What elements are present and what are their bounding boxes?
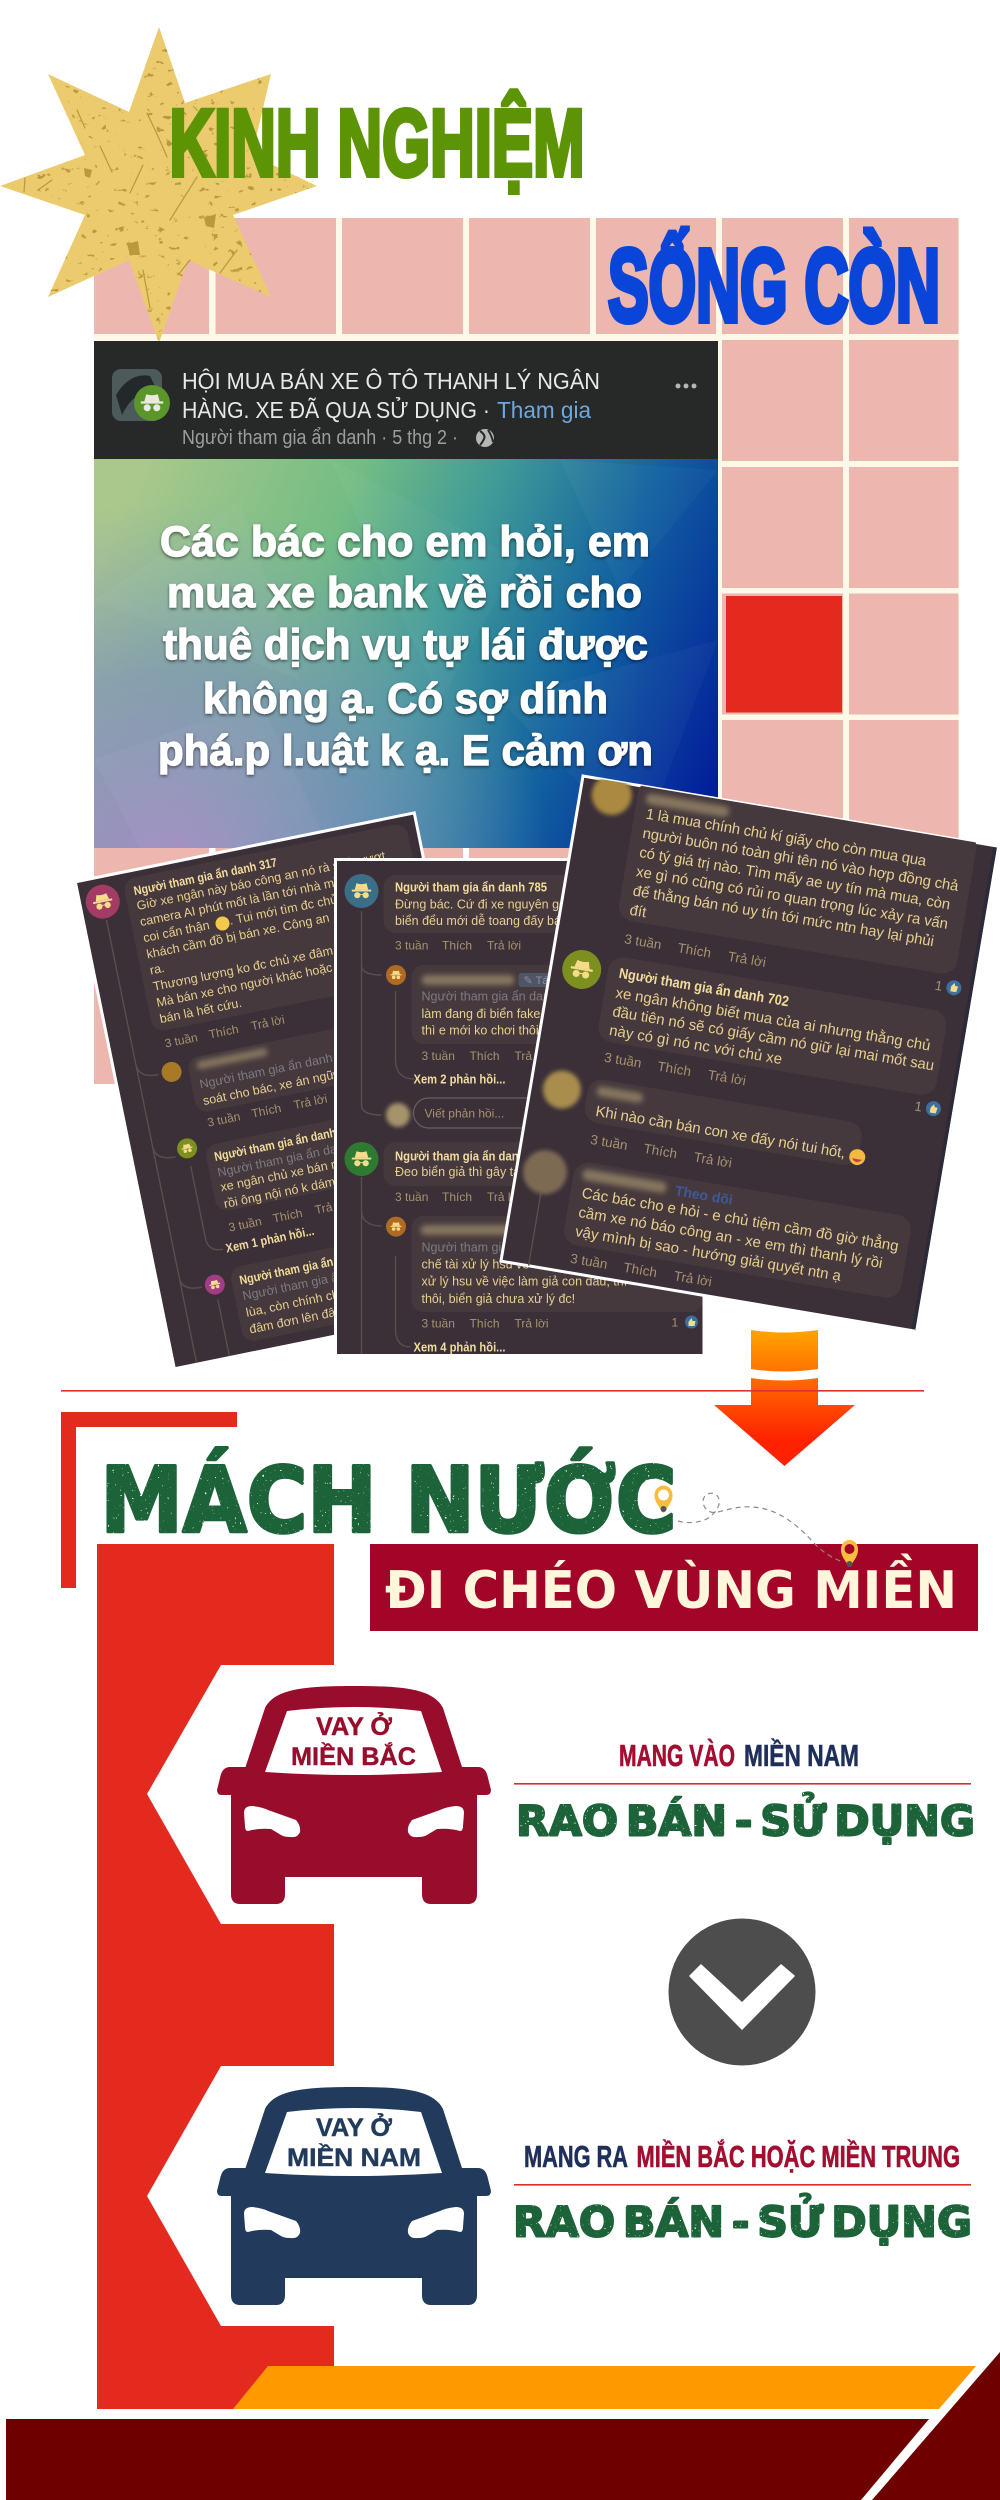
reply 2 with blurred name: Xem 4 phản hồi... [414,1340,506,1354]
comment bubble 1: Thích [442,938,472,952]
orange footer bar [233,2366,976,2409]
comment 2: Người tham gia ẩn danh 702 [618,966,790,1010]
title: Kinh nghiệm: KINH NGHIỆM [170,90,584,196]
text: mang ra miền bắc hoặc miền trung [524,2138,960,2174]
reply 3 [204,1248,334,1340]
comment 1: để thằng bán nó uy tín tới mức ntn hay lại phủi [632,883,935,950]
comment 3 [540,1068,866,1168]
post text: phá.p l.uật k ạ. E cảm ơn [158,727,653,775]
post text: Các bác cho em hỏi, em [160,518,650,566]
reply input [383,1097,527,1130]
star badge [0,27,317,343]
text: rao bán sử dụng: RAO BÁN - SỬ DỤNG [516,1792,975,1846]
comment text [134,852,384,1048]
reply 2 with blurred name [386,1216,704,1354]
comment text: 3 tuần [163,1030,199,1051]
reply 2: rồi ông nội nó k dám [223,1175,336,1211]
reply 1 [162,1029,334,1126]
banner text: ĐI CHÉO VÙNG MIỀN [385,1553,957,1621]
comment 2: 3 tuần [603,1050,643,1071]
route with pins [678,1493,843,1562]
comment 3: 3 tuần [589,1132,629,1153]
icon: red car [217,1686,491,1904]
comment 1: có tý giá trị nào. Tìm mấy ae uy tín mà mua, còn [638,844,952,913]
reply 3: Người tham gia ẩn danh [238,1249,362,1287]
reply 3: lùa, còn chính chủ [245,1286,347,1320]
reply with blurred name: làm đang đi biển fake [422,1007,540,1021]
comment bubble 1: Đừng bác. Cứ đi xe nguyên gốc [395,898,572,912]
reply input: Viết phản hồi... [424,1106,504,1120]
banner [370,1544,978,1631]
red grid cell [726,596,842,712]
reply 1: Người tham gia ẩn danh [198,1051,334,1091]
comment bubble 2: Trả lời [487,1190,521,1204]
reply 2 with blurred name: Thích [470,1316,500,1330]
text: mang vào miền nam: MANG VÀO [619,1738,735,1773]
comment 2: này có gì nó nc với chủ xe [608,1022,783,1068]
comment text: Thích [208,1022,240,1042]
comment 4: 3 tuần [569,1251,609,1272]
icon: red car: MIỀN BẮC [291,1741,416,1771]
reply 2: Thích [271,1206,304,1226]
reply with blurred name: 3 tuần [422,1049,455,1063]
comment text: coi cẩn thận . Tui mới tìm đc chủ xe [142,889,355,945]
comment bubble [125,825,412,1030]
comment 1: 1 là mua chính chủ kí giấy cho còn mua qua [645,806,928,870]
reply 2 with blurred name: 1 [672,1316,678,1330]
comment text: ra. [149,961,166,978]
reply 3: đâm đơn lên đây [248,1304,343,1336]
comment 1: 1 [934,978,944,994]
reply with blurred name: Người tham gia ẩn danh [422,990,557,1004]
comment 1: người buôn nó toàn ghi tên nó vào hợp đồng chả [641,825,960,895]
red corner bracket [61,1412,237,1588]
comment bubble 2: 3 tuần [395,1190,428,1204]
comment bubble 2: Đeo biển giả thì gây tai nạn [395,1165,547,1179]
icon: navy car [217,2087,491,2305]
reply 2 with blurred name: Người tham gia ẩn danh [422,1240,557,1254]
reply with blurred name: Trả lời [514,1049,549,1063]
comment 2: xe ngân không biết mua của ai nhưng thằng chủ [614,985,932,1055]
comment text: Người tham gia ẩn danh 317 [132,855,278,898]
reply 2: Trả lời [314,1196,350,1217]
text: mang vào miền nam [619,1738,859,1773]
reply with blurred name: ✎ Tác giả [524,975,573,987]
post text: thuê dịch vụ tự lái được [163,621,648,669]
comment bubble 2 [344,1142,520,1201]
comment 4: vậy mình bị sao - hướng giải quyết ntn ạ [574,1223,843,1285]
comment bubble 2: Người tham gia ẩn danh 8 [395,1150,535,1164]
comment bubble 1: Người tham gia ẩn danh 785 [395,880,547,894]
reply with blurred name: thì e mới ko chơi thôi [422,1024,539,1038]
comment bubble 1: 3 tuần [395,938,428,952]
comment 2: đầu tiên nó sẽ có giấy cầm nó giữ lại mai mốt sau [611,1003,935,1074]
comment 2 [562,950,946,1116]
post text: không ạ. Có sợ dính [203,675,608,723]
post text: mua xe bank về rồi cho [167,569,642,617]
icon: map pin 2 [841,1540,858,1567]
reply 2 with blurred name: chế tài xử lý hsu về [422,1258,529,1272]
avatar [86,884,120,919]
dark footer corner [872,2352,1000,2500]
comment 2: 1 [913,1099,923,1115]
comment 1: xe gì nó cũng có rủi ro quan trọng lúc xảy ra vấn [635,863,949,933]
group name line 2: HÀNG. XE ĐÃ QUA SỬ DỤNG · [182,395,490,423]
comment text: Mà bán xe cho người khác hoặc [155,960,334,1010]
reply 2: Xem 1 phản hồi... [224,1224,315,1256]
comment 1 [589,778,976,996]
comment 1: Trả lời [727,949,767,970]
panel: comment screenshot 2 [336,860,704,1354]
red arrow shape [97,1544,334,2409]
heading: Mách nước: MÁCH NƯỚC [100,1446,676,1554]
group avatar [112,369,170,421]
reply 2: Người tham gia ẩn danh [216,1139,352,1180]
icon: navy car: MIỀN NAM [287,2143,421,2172]
comment 2: Trả lời [707,1067,747,1088]
reply 2 [177,1120,334,1253]
icon: navy car: VAY Ở [316,2112,393,2142]
post image background [94,459,718,848]
comment 1: Thích [676,940,712,961]
pink grid background [94,218,959,1084]
reply 1: Trả lời [292,1092,328,1112]
reply with blurred name: Thích [470,1049,500,1063]
reply 2: xe ngân chủ xe bán rồi [219,1155,346,1194]
comment 4: Theo dõi [674,1182,734,1208]
comment 4: Thích [622,1260,658,1280]
panel: comment screenshot 3 [501,768,998,1331]
reply 2: Người tham gia ẩn danh [213,1126,337,1164]
post meta: Người tham gia ẩn danh · 5 thg 2 · [182,427,458,449]
comment bubble 1 [344,874,564,950]
post text [158,518,653,775]
comment 4 [520,1148,910,1298]
comment 3: Thích [643,1141,678,1161]
reply 2: 3 tuần [227,1214,263,1235]
arrow: down [714,1330,855,1466]
comment text: Trả lời [250,1013,286,1033]
icon: globe [476,429,494,447]
comment bubble 2: Thích [442,1190,472,1204]
comment 4: Trả lời [673,1268,713,1289]
reply 3: Người tham gia ẩn danh [241,1262,377,1303]
reply 2 with blurred name: thôi, biển giả chưa xử lý đc! [422,1292,575,1306]
text: rao bán sử dụng: RAO BÁN - SỬ DỤNG [513,2192,972,2246]
icon: chevron down circle [668,1918,816,2066]
comment 3: Khi nào cần bán con xe đấy nói tui hốt, [594,1103,847,1162]
comment 1: đít [628,902,648,921]
dark footer bar [6,2419,929,2500]
comment 3: Trả lời [693,1149,733,1171]
comment bubble 1: biển đểu mới dễ toang đấy bác [395,913,567,928]
text: mang ra miền bắc hoặc miền trung: MANG RA [524,2140,628,2174]
panel: facebook post [94,341,718,848]
reply 2 with blurred name: 3 tuần [422,1316,455,1330]
icon: red car: VAY Ở [316,1711,393,1741]
reply with blurred name [386,965,550,1086]
comment 4: cầm xe nó báo công an - xe em thì thanh lý rồi [577,1204,884,1272]
post header bar [94,341,718,459]
comment text: camera AI phút mốt là lần tới nhà mình [139,872,352,929]
icon: map pin 1 [654,1486,672,1513]
comment text: khách cầm đồ bị bán xe. Công an [145,911,331,961]
reply 1: Thích [250,1101,282,1121]
reply 1: soát cho bác, xe án ngữ [202,1068,336,1108]
icon: more dots [676,384,696,388]
divider line [61,1390,924,1392]
reply 2 with blurred name: xử lý hsu về việc làm giả con dấu, thì [422,1274,627,1288]
join link: Tham gia [497,397,591,423]
comment text: Thương lượng ko đc chủ xe đâm [152,943,334,994]
comment 4: Các bác cho e hỏi - e chủ tiệm cầm đồ giờ thẳng [580,1184,900,1255]
comment text: bán là hết cứu. [158,996,243,1026]
comment bubble 1: Trả lời [487,938,521,952]
group name: HỘI MUA BÁN XE Ô TÔ THANH LÝ NGÂN [182,367,600,394]
comment 1: 3 tuần [623,931,663,952]
reply 2 with blurred name: Trả lời [514,1316,549,1330]
comment 2: Thích [656,1059,692,1079]
text: mang vào miền nam: MIỀN NAM [744,1738,859,1773]
comment text: Giờ xe ngân này báo công an nó rà soát vượt [135,849,387,913]
panel: comment screenshot 1 [77,811,425,1367]
reply 1: 3 tuần [206,1109,242,1130]
emoji [216,916,230,930]
divider line [514,2184,971,2186]
reply with blurred name: Xem 2 phản hồi... [414,1072,506,1086]
divider line [514,1783,971,1785]
